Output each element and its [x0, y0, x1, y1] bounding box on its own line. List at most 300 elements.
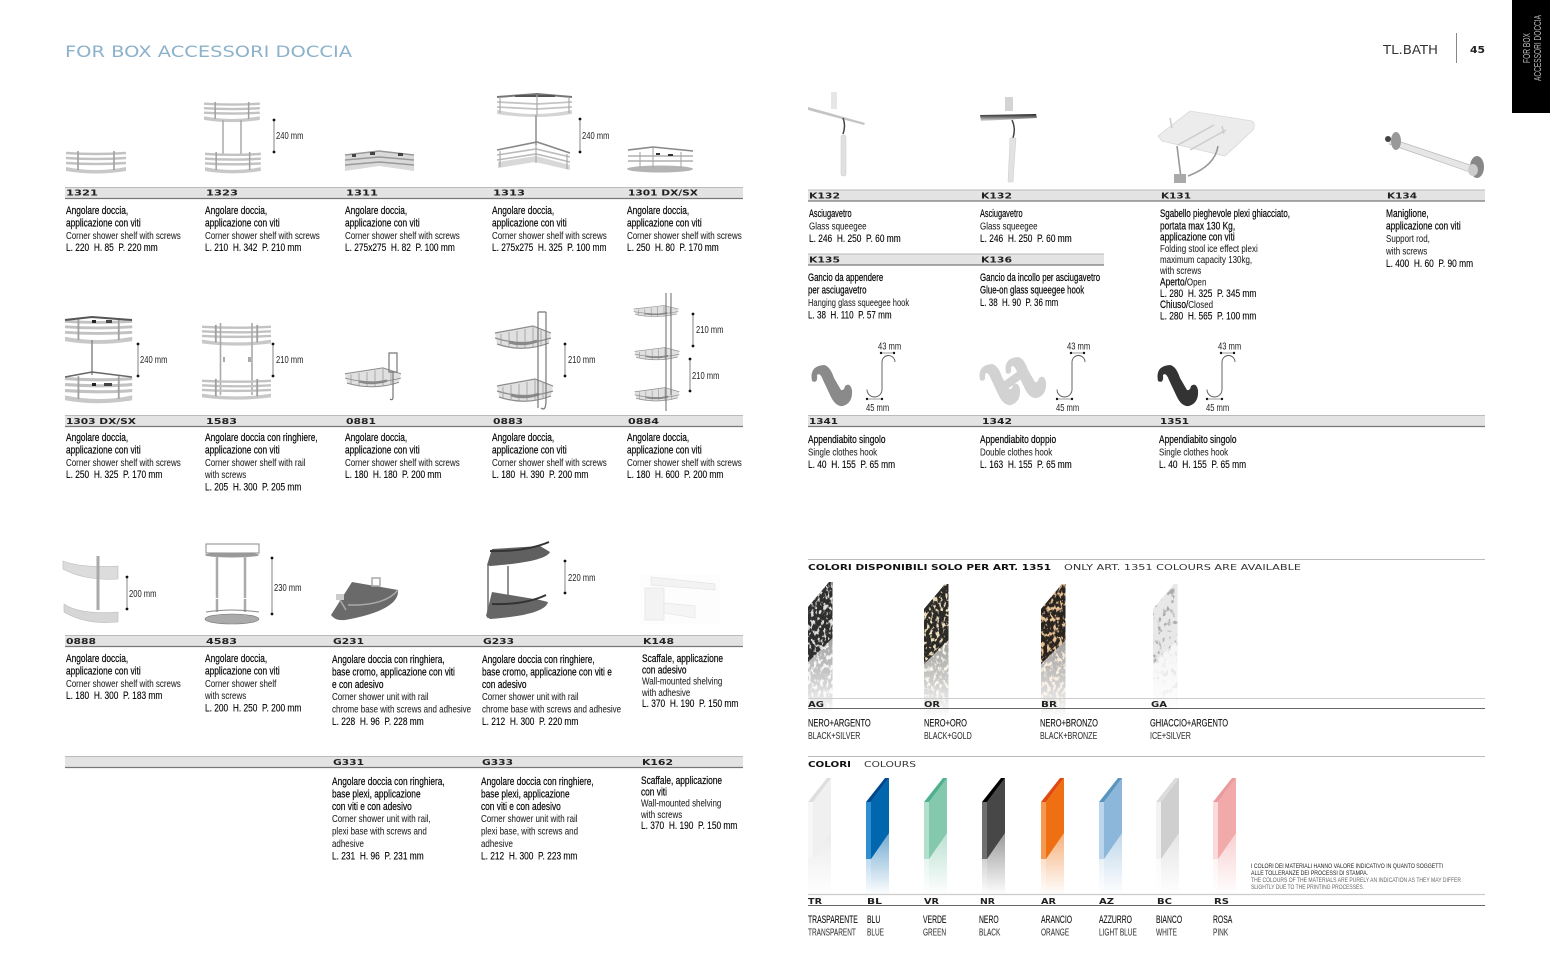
description: Corner shower shelf with screws	[627, 230, 742, 241]
description: L. 180 H. 390 P. 200 mm	[492, 469, 588, 482]
icon: glass squeegee	[808, 92, 865, 176]
swatch codes: NR	[980, 897, 995, 906]
description: Angolare doccia,	[627, 205, 689, 217]
icon: double shelf	[65, 317, 139, 403]
description: Support rod,	[1386, 233, 1430, 244]
description: L. 40 H. 155 P. 65 mm	[1159, 459, 1246, 472]
product K134	[1385, 132, 1484, 270]
dimension label: 200 mm	[129, 588, 156, 599]
description: L. 275x275 H. 82 P. 100 mm	[345, 242, 455, 255]
swatch names: BLACK+SILVER	[808, 730, 861, 741]
icon: double hook	[980, 357, 1046, 405]
description	[332, 654, 471, 728]
description: Angolare doccia,	[627, 432, 689, 444]
icon: glass squeegee	[980, 97, 1037, 182]
description: chrome base with screws and adhesive	[482, 704, 621, 715]
description: chrome base with screws and adhesive	[332, 704, 471, 715]
description: Angolare doccia,	[205, 653, 267, 665]
product K132 frosted squeegee	[808, 92, 901, 246]
product K135	[808, 256, 909, 322]
code bars, left page	[65, 188, 743, 768]
description: with adhesive	[641, 687, 690, 698]
dimension label: 240 mm	[276, 130, 303, 141]
swatch names: BLU	[867, 913, 880, 925]
swatch: blue	[866, 778, 889, 895]
code: 1342	[982, 417, 1012, 426]
swatch codes	[808, 700, 1168, 709]
swatch codes: RS	[1214, 897, 1229, 906]
product 4583	[204, 544, 301, 715]
swatch codes: TR	[808, 897, 822, 906]
icon: double corner shelf	[497, 94, 581, 170]
heading: COLORI	[808, 760, 851, 769]
product G231	[331, 578, 471, 728]
description	[1159, 208, 1290, 323]
product 1301 DX/SX	[627, 147, 742, 255]
description	[205, 205, 320, 255]
description: L. 400 H. 60 P. 90 mm	[1386, 258, 1473, 270]
swatch names: ORANGE	[1041, 926, 1069, 938]
icon: double corner plexi shelf	[486, 542, 566, 619]
description	[627, 205, 742, 255]
description: L. 180 H. 600 P. 200 mm	[627, 469, 723, 482]
description: portata max 130 Kg,	[1160, 221, 1235, 233]
swatch names: ARANCIO	[1041, 913, 1072, 925]
code: 1321	[66, 188, 99, 198]
description: Single clothes hook	[1159, 447, 1228, 458]
description: maximum capacity 130kg,	[1160, 254, 1252, 265]
description	[66, 432, 181, 482]
description: Angolare doccia,	[205, 205, 267, 217]
dimension labels: 210 mm	[692, 370, 719, 381]
description: applicazione con viti	[66, 665, 141, 678]
description: Asciugavetro	[809, 208, 852, 220]
description	[980, 272, 1101, 309]
description: with screws	[1385, 245, 1427, 257]
description	[627, 432, 742, 482]
product K132 chrome squeegee	[980, 97, 1072, 246]
description: L. 205 H. 300 P. 205 mm	[205, 482, 301, 494]
swatch names: ICE+SILVER	[1150, 730, 1191, 741]
icon: double shelf	[204, 102, 275, 173]
description: Asciugavetro	[980, 208, 1023, 220]
description: Aperto/Open	[1160, 277, 1206, 289]
heading	[808, 563, 1301, 572]
swatch names: WHITE	[1156, 926, 1177, 938]
description: Corner shower unit with rail	[481, 813, 578, 824]
code: 1301 DX/SX	[628, 188, 699, 198]
description: Gancio da appendere	[808, 272, 883, 284]
description: with screws	[204, 469, 246, 480]
description: Folding stool ice effect plexi	[1160, 243, 1258, 254]
description: Corner shower shelf with screws	[66, 678, 181, 689]
swatch: pink	[1213, 778, 1236, 895]
hook diagram: 45 mm	[866, 402, 889, 413]
code: 4583	[206, 637, 237, 646]
description: applicazione con viti	[492, 217, 567, 230]
description: applicazione con viti	[492, 444, 567, 457]
icon: double wire basket	[495, 312, 566, 409]
code: 1323	[206, 188, 238, 198]
dimension label: 210 mm	[276, 354, 303, 365]
code: G231	[333, 637, 365, 646]
description	[980, 208, 1072, 246]
description: Wall-mounted shelving	[641, 798, 721, 809]
product K131	[1158, 111, 1290, 323]
swatch names	[808, 716, 1228, 741]
panel: colours	[808, 756, 1485, 938]
icon: corner plexi shelf	[331, 578, 398, 620]
swatch names: AZZURRO	[1099, 913, 1132, 925]
description: con viti e con adesivo	[481, 801, 561, 813]
code: K132	[809, 192, 840, 200]
description: Angolare doccia,	[345, 205, 407, 217]
dimension label: 210 mm	[568, 354, 595, 365]
product 1303 DX/SX	[65, 317, 181, 482]
description: L. 250 H. 80 P. 170 mm	[627, 242, 719, 255]
description: applicazione con viti	[627, 444, 702, 457]
description: L. 180 H. 180 P. 200 mm	[345, 469, 441, 482]
icon: support rod	[1385, 132, 1484, 178]
swatch: black silver	[808, 582, 833, 716]
description: adhesive	[332, 838, 364, 849]
product 0884	[627, 293, 742, 482]
swatch codes: AG	[808, 700, 824, 709]
description	[332, 776, 445, 863]
hook diagram: 43 mm	[1067, 340, 1090, 352]
dimension label: 240 mm	[140, 354, 167, 365]
icon: corner shelf	[66, 151, 126, 174]
description: Gancio da incollo per asciugavetro	[980, 272, 1101, 284]
description: con adesivo	[642, 664, 687, 677]
product 0883	[492, 312, 607, 482]
description: L. 275x275 H. 325 P. 100 mm	[492, 242, 606, 255]
swatch codes: AR	[1041, 897, 1056, 906]
description: applicazione con viti	[205, 217, 280, 230]
heading: COLOURS	[864, 760, 916, 769]
swatch names: NERO+ARGENTO	[808, 716, 871, 729]
description: applicazione con viti	[345, 217, 420, 230]
description	[492, 432, 607, 482]
description: Hanging glass squeegee hook	[808, 297, 909, 308]
swatch names: BLACK+BRONZE	[1040, 730, 1097, 741]
dimension label: 230 mm	[274, 582, 301, 593]
dimension labels	[692, 324, 723, 381]
code: K134	[1387, 192, 1418, 200]
description: Chiuso/Closed	[1160, 299, 1213, 312]
description: L. 280 H. 565 P. 100 mm	[1160, 311, 1256, 323]
swatch names: BLACK	[979, 926, 1000, 938]
description: L. 38 H. 90 P. 36 mm	[980, 297, 1058, 309]
description: Corner shower shelf with screws	[492, 230, 607, 241]
hook diagram: 45 mm	[1206, 402, 1229, 413]
swatch: transparent	[808, 778, 831, 895]
description: applicazione con viti	[66, 217, 141, 230]
code: 1351	[1160, 417, 1190, 426]
description: per asciugavetro	[808, 284, 867, 297]
description	[66, 205, 181, 255]
description	[980, 434, 1072, 472]
code: K136	[981, 256, 1013, 264]
description: L. 180 H. 300 P. 183 mm	[66, 690, 162, 703]
product 1351	[1158, 340, 1246, 472]
product 0881	[345, 353, 460, 482]
description	[492, 205, 607, 255]
swatch: orange	[1041, 778, 1064, 895]
description: L. 38 H. 110 P. 57 mm	[808, 309, 892, 322]
code: K135	[809, 256, 841, 264]
swatch codes: BL	[867, 897, 882, 906]
description: Double clothes hook	[980, 447, 1053, 458]
hook diagram: 43 mm	[878, 340, 901, 352]
description: Appendiabito singolo	[1159, 434, 1237, 446]
heading: ONLY ART. 1351 COLOURS ARE AVAILABLE	[1064, 563, 1301, 572]
swatch names: BLACK+GOLD	[924, 730, 972, 741]
description: Angolare doccia con ringhiera,	[332, 776, 445, 788]
swatch names: NERO	[979, 913, 999, 925]
swatch codes: BC	[1157, 897, 1172, 906]
description: L. 40 H. 155 P. 65 mm	[808, 459, 895, 472]
description: Appendiabito doppio	[980, 434, 1057, 446]
swatch: ice silver	[1153, 584, 1178, 702]
description: L. 246 H. 250 P. 60 mm	[980, 233, 1072, 246]
description: Glue-on glass squeegee hook	[980, 284, 1084, 297]
code: 0888	[66, 637, 97, 646]
description: Corner shower shelf with screws	[345, 457, 460, 468]
code: G333	[482, 758, 513, 767]
swatch names: VERDE	[923, 913, 946, 925]
product G331	[332, 758, 445, 863]
description	[345, 432, 460, 482]
description: Single clothes hook	[808, 447, 877, 458]
description	[641, 653, 738, 711]
icon: frosted double shelf	[63, 556, 128, 623]
icon: folding stool	[1158, 111, 1254, 183]
code: K148	[643, 637, 675, 646]
description: plexi base with screws and	[332, 826, 427, 837]
swatch names: NERO+ORO	[924, 716, 967, 729]
icon: triple wire basket	[634, 293, 694, 411]
description: Wall-mounted shelving	[642, 676, 722, 687]
description: L. 210 H. 342 P. 210 mm	[205, 242, 301, 255]
description: base cromo, applicazione con viti	[332, 666, 455, 679]
dimension labels: 210 mm	[696, 324, 723, 335]
description: Scaffale, applicazione	[642, 653, 723, 665]
code: 1341	[809, 417, 839, 426]
description: L. 246 H. 250 P. 60 mm	[809, 233, 901, 246]
description: L. 220 H. 85 P. 220 mm	[66, 242, 158, 255]
description: con viti e con adesivo	[332, 801, 412, 813]
description: Angolare doccia con ringhiere,	[482, 654, 595, 666]
swatch names	[808, 913, 1233, 938]
description: L. 280 H. 325 P. 345 mm	[1160, 288, 1256, 300]
code: 1313	[493, 188, 525, 198]
swatch codes: OR	[924, 700, 940, 709]
code: G233	[483, 637, 514, 646]
description: L. 370 H. 190 P. 150 mm	[641, 820, 737, 833]
description: Glass squeegee	[809, 221, 867, 232]
description: L. 212 H. 300 P. 220 mm	[482, 716, 578, 728]
product G233	[482, 542, 621, 728]
description: con viti	[641, 786, 667, 799]
description: Angolare doccia con ringhiere,	[481, 776, 594, 788]
icon: pale wall shelf	[640, 574, 720, 624]
hook diagram	[1056, 340, 1090, 413]
description: applicazione con viti	[205, 444, 280, 457]
swatch names: ROSA	[1213, 913, 1233, 925]
product 1311	[345, 151, 460, 255]
description: applicazione con viti	[345, 444, 420, 457]
swatch names: NERO+BRONZO	[1040, 716, 1098, 729]
description: Corner shower shelf with screws	[345, 230, 460, 241]
description: Corner shower unit with rail,	[332, 813, 431, 824]
description: e con adesivo	[332, 679, 384, 691]
dimension label: 240 mm	[582, 130, 609, 141]
description: Angolare doccia con ringhiera,	[332, 654, 445, 666]
description: adhesive	[481, 838, 513, 849]
product 1583	[202, 323, 318, 494]
icon: corner shelf	[627, 147, 693, 172]
description: with screws	[204, 690, 246, 701]
description	[808, 434, 895, 472]
description: Corner shower shelf with screws	[492, 457, 607, 468]
icon: double shelf with rail	[202, 323, 274, 400]
icon: corner shelf	[345, 151, 414, 171]
logo: TL.BATH: TL.BATH	[1382, 43, 1438, 57]
description: L. 200 H. 250 P. 200 mm	[205, 703, 301, 715]
hook diagram: 45 mm	[1056, 402, 1079, 413]
swatch names: BLUE	[867, 926, 884, 938]
swatch: green	[924, 778, 947, 895]
product K162	[640, 758, 737, 833]
description: Angolare doccia,	[66, 653, 128, 665]
description	[345, 205, 460, 255]
swatch: light blue	[1099, 778, 1122, 895]
product 1313	[492, 94, 609, 255]
swatch codes: BR	[1041, 700, 1057, 709]
product 1341	[808, 340, 901, 472]
description: Angolare doccia,	[492, 205, 554, 217]
description: Angolare doccia con ringhiere,	[205, 432, 318, 444]
dimension label: 220 mm	[568, 572, 595, 583]
code: 0884	[628, 417, 660, 426]
swatch names: TRASPARENTE	[808, 913, 858, 925]
description: con adesivo	[482, 679, 527, 691]
description: applicazione con viti	[205, 665, 280, 678]
disclaimer note	[1251, 863, 1461, 891]
code: K132	[981, 192, 1012, 200]
icon: wire basket with hook	[345, 353, 401, 400]
description: Corner shower shelf with screws	[66, 230, 181, 241]
code: 0883	[493, 417, 523, 426]
description: with screws	[1159, 265, 1201, 276]
description: Angolare doccia,	[345, 432, 407, 444]
description: Corner shower shelf with rail	[205, 457, 306, 468]
description: base plexi, applicazione	[481, 788, 570, 801]
product K136	[980, 256, 1101, 309]
swatch names: PINK	[1213, 926, 1228, 938]
description: Angolare doccia,	[492, 432, 554, 444]
description: base cromo, applicazione con viti e	[482, 666, 612, 679]
code: 1303 DX/SX	[66, 417, 137, 426]
swatch codes: AZ	[1099, 897, 1114, 906]
description: Scaffale, applicazione	[641, 775, 722, 787]
title: FOR BOX ACCESSORI DOCCIA	[65, 42, 352, 61]
description	[204, 432, 318, 494]
swatch names: LIGHT BLUE	[1099, 926, 1137, 938]
swatch names: GREEN	[923, 926, 946, 938]
disclaimer note: SLIGHTLY DUE TO THE PRINTING PROCESSES.	[1251, 884, 1364, 891]
description: plexi base, with screws and	[481, 826, 578, 837]
description	[1385, 208, 1473, 270]
description: Angolare doccia,	[66, 432, 128, 444]
side tab: FOR BOX	[1522, 33, 1533, 63]
hook diagram: 43 mm	[1218, 340, 1241, 352]
swatch codes: VR	[924, 897, 939, 906]
page number: 45	[1470, 45, 1485, 56]
icon: dark single hook	[1158, 365, 1198, 406]
swatch codes	[808, 897, 1229, 906]
description: Corner shower unit with rail	[482, 691, 579, 702]
panel: colours only for art. 1351	[808, 560, 1485, 741]
description: Maniglione,	[1386, 208, 1429, 220]
description: L. 250 H. 325 P. 170 mm	[66, 469, 162, 482]
side tab	[1512, 0, 1550, 113]
description	[640, 775, 737, 833]
swatch names: GHIACCIO+ARGENTO	[1150, 716, 1228, 729]
description	[204, 653, 301, 715]
description	[482, 654, 621, 728]
description: with screws	[640, 809, 682, 820]
disclaimer note: I COLORI DEI MATERIALI HANNO VALORE INDICATIVO IN QUANTO SOGGETTI	[1251, 863, 1443, 870]
heading	[808, 760, 916, 769]
description: L. 212 H. 300 P. 223 mm	[481, 850, 577, 863]
description: Corner shower shelf	[205, 678, 277, 689]
description: Corner shower shelf with screws	[205, 230, 320, 241]
description: applicazione con viti	[1386, 221, 1461, 233]
icon: single hook	[812, 365, 852, 406]
description: Glass squeegee	[980, 221, 1038, 232]
code: 1583	[206, 417, 237, 426]
description: base plexi, applicazione	[332, 788, 421, 801]
description: Corner shower unit with rail	[332, 691, 429, 702]
hook diagram	[1206, 340, 1241, 413]
description: Appendiabito singolo	[808, 434, 886, 446]
swatch: black bronze	[1041, 584, 1066, 718]
product 1321	[66, 151, 181, 255]
description: L. 370 H. 190 P. 150 mm	[642, 698, 738, 711]
description: Corner shower shelf with screws	[627, 457, 742, 468]
description: Angolare doccia,	[66, 205, 128, 217]
description	[809, 208, 901, 246]
description	[808, 272, 909, 322]
description: applicazione con viti	[66, 444, 141, 457]
swatch: black	[982, 778, 1005, 895]
disclaimer note: THE COLOURS OF THE MATERIALS ARE PURELY AN INDICATION AS THEY MAY DIFFER	[1251, 877, 1461, 884]
product G333	[481, 758, 594, 863]
hook diagram	[866, 340, 901, 413]
description: Corner shower shelf with screws	[66, 457, 181, 468]
description	[1159, 434, 1246, 472]
heading: COLORI DISPONIBILI SOLO PER ART. 1351	[808, 563, 1052, 572]
code: K162	[642, 758, 673, 767]
icon: double shelf	[205, 544, 273, 624]
description: L. 231 H. 96 P. 231 mm	[332, 850, 424, 863]
code bars, right page	[808, 190, 1485, 426]
swatch names: TRANSPARENT	[808, 926, 856, 938]
code: 0881	[346, 417, 377, 426]
description: applicazione con viti	[1160, 232, 1235, 244]
